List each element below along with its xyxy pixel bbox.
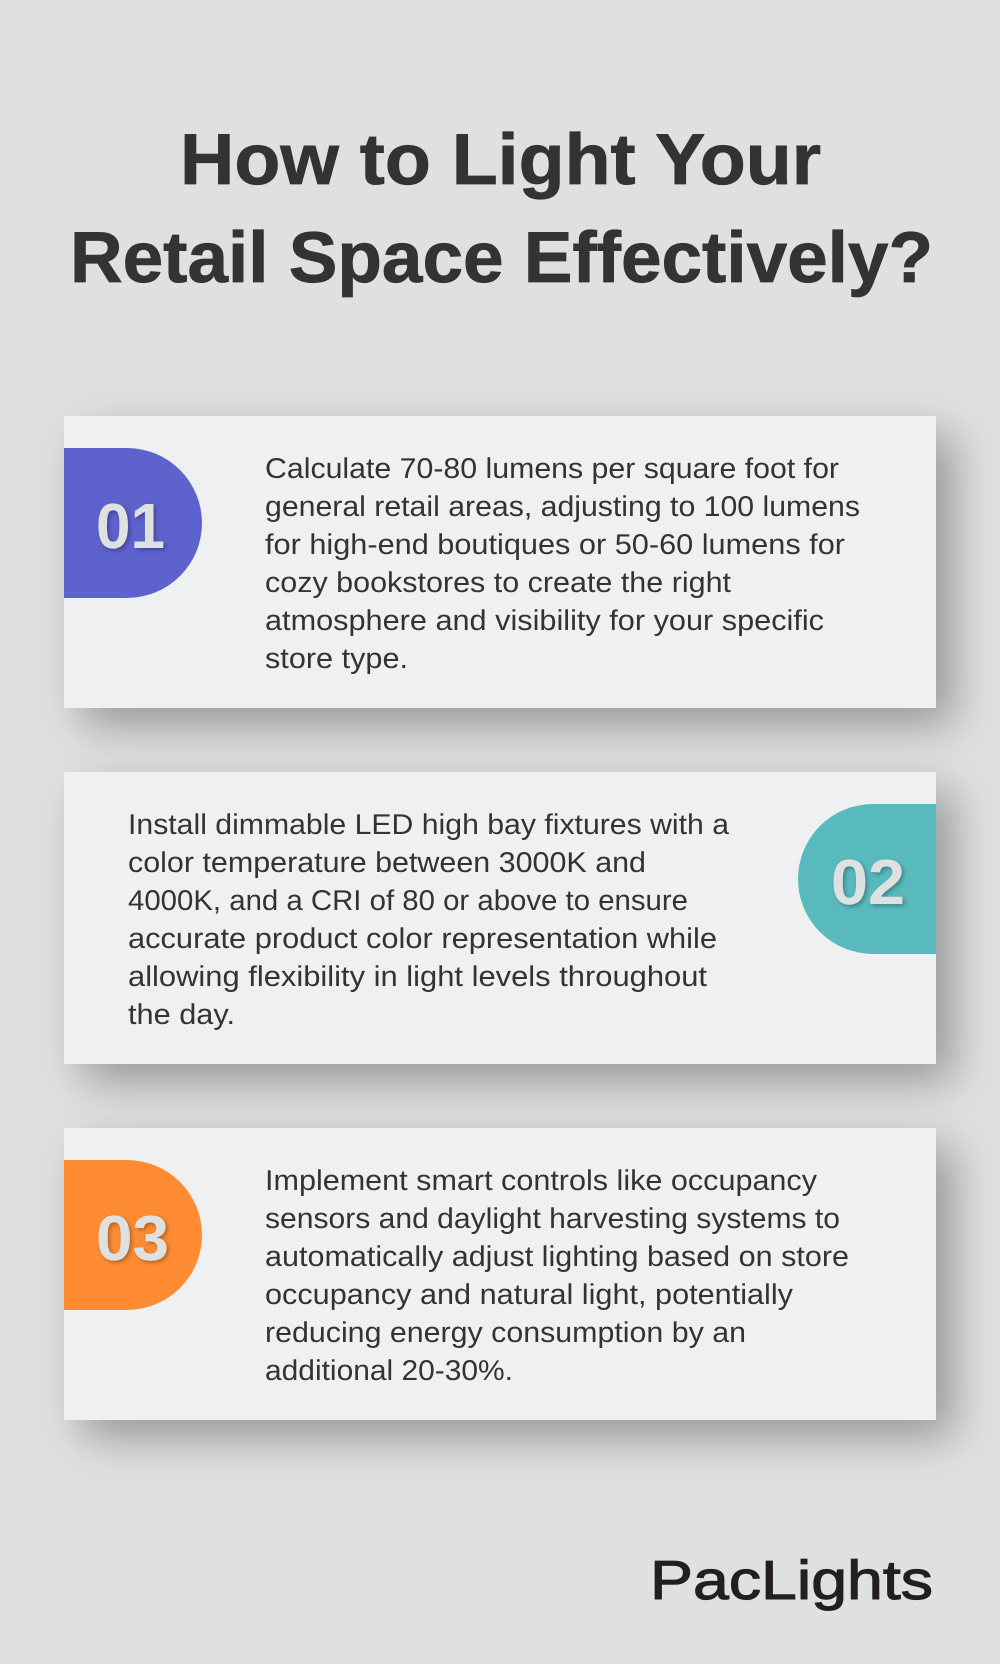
number: 01: 01 [96, 490, 165, 562]
text block: step 01 description [265, 453, 860, 675]
title: How to Light Your [180, 120, 821, 200]
title [70, 120, 933, 298]
text block: step 01 description: general retail areas, adjusting to 100 lumens [265, 491, 860, 523]
text block: step 01 description: atmosphere and visibility for your specific [265, 605, 824, 637]
text block: step 01 description: Calculate 70-80 lumens per square foot for [265, 453, 840, 485]
number: 02: 02 [831, 846, 905, 918]
text block: step 03 description: automatically adjust lighting based on store [265, 1241, 849, 1273]
text block: step 01 description: cozy bookstores to create the right [265, 567, 731, 599]
number: 03: 03 [96, 1202, 169, 1274]
text block: step 03 description: occupancy and natural light, potentially [265, 1279, 794, 1311]
text block: step 01 description: for high-end boutiques or 50-60 lumens for [265, 529, 846, 561]
text block: step 02 description: color temperature between 3000K and [128, 847, 646, 879]
text block: step 03 description: additional 20-30%. [265, 1355, 513, 1387]
text block: step 03 description: reducing energy consumption by an [265, 1317, 746, 1349]
text block: step 03 description [265, 1165, 849, 1387]
badge: 01 purple pill [64, 448, 202, 598]
text block: step 01 description: store type. [265, 643, 408, 675]
badge: 03 orange pill [64, 1160, 202, 1310]
logo: PacLights: PacLights [650, 1549, 933, 1611]
text block: step 02 description: the day. [128, 999, 235, 1031]
text block: step 03 description: sensors and daylight harvesting systems to [265, 1203, 840, 1235]
text block: step 02 description: 4000K, and a CRI of 80 or above to ensure [128, 885, 688, 917]
panel: step 01 [64, 416, 936, 708]
panel: step 03 [64, 1128, 936, 1420]
text block: step 02 description: accurate product color representation while [128, 923, 717, 955]
text block: step 02 description: allowing flexibility in light levels throughout [128, 961, 707, 993]
text block: step 02 description [128, 809, 729, 1031]
title: Retail Space Effectively? [70, 218, 933, 298]
text block: step 03 description: Implement smart controls like occupancy [265, 1165, 818, 1197]
badge: 02 teal pill [798, 804, 936, 954]
panel: step 02 [64, 772, 936, 1064]
text block: step 02 description: Install dimmable LED high bay fixtures with a [128, 809, 729, 841]
